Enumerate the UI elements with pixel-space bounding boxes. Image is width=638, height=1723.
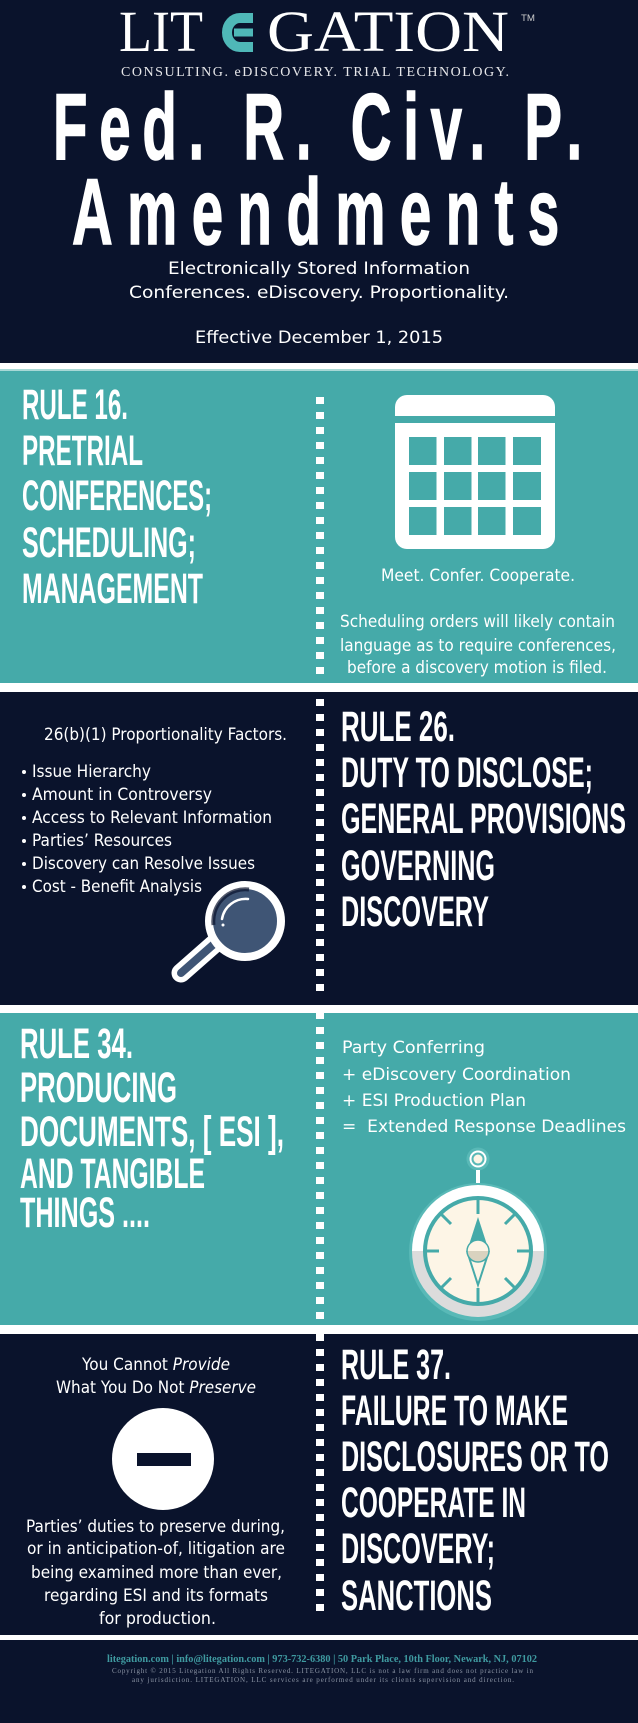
text: party conferring xyxy=(342,1038,626,1136)
text: proportionality factors: 26(b)(1) Proportionality Factors. xyxy=(44,725,287,744)
heading: rule 34: DOCUMENTS, [ ESI ], xyxy=(20,1108,284,1156)
text: scheduling orders: Scheduling orders will likely contain xyxy=(340,612,615,631)
caption: meet confer cooperate: Meet. Confer. Cooperate. xyxy=(381,566,575,585)
text: duties to preserve: for production. xyxy=(99,1609,216,1628)
text: duties to preserve: or in anticipation-of, litigation are xyxy=(27,1539,285,1558)
logo: GATION xyxy=(267,0,509,64)
logo: TM xyxy=(521,13,535,23)
heading: rule 26 xyxy=(341,703,626,936)
title: Fed. R. Civ. P. xyxy=(53,75,582,180)
text: party conferring: = Extended Response Deadlines xyxy=(342,1117,626,1136)
list: factors: Discovery can Resolve Issues xyxy=(32,854,255,873)
copyright: any jurisdiction. LITEGATION, LLC services are performed under its clients supervision and direction. xyxy=(132,1676,514,1684)
heading: rule 26: RULE 26. xyxy=(341,703,455,751)
contact line: litegation.com | info@litegation.com | 973-732-6380 | 50 Park Place, 10th Floor, Newark, NJ, 07102 xyxy=(107,1654,537,1665)
heading: rule 34: THINGS .... xyxy=(20,1189,150,1237)
text: duties to preserve: regarding ESI and its formats xyxy=(44,1586,268,1605)
text: party conferring: + ESI Production Plan xyxy=(342,1091,526,1110)
heading: rule 34: PRODUCING xyxy=(20,1064,177,1112)
panel: header xyxy=(0,0,638,363)
heading: rule 37: RULE 37. xyxy=(341,1341,451,1389)
icon: magnifying glass xyxy=(181,885,281,973)
subtitle: Electronically Stored Information xyxy=(168,259,470,278)
heading: rule 16: CONFERENCES; xyxy=(22,472,212,520)
list: factors: Parties’ Resources xyxy=(32,831,172,850)
effective date: Effective December 1, 2015 xyxy=(195,328,443,347)
icon: compass xyxy=(409,1148,547,1321)
title: Amendments xyxy=(72,160,559,265)
list: factors: Cost - Benefit Analysis xyxy=(32,877,202,896)
copyright: Copyright © 2015 Litegation All Rights Reserved. LITEGATION, LLC is not a law firm and does not practice law in xyxy=(112,1667,534,1675)
heading: rule 16: RULE 16. xyxy=(22,381,128,429)
heading: rule 16 xyxy=(22,381,212,613)
logo xyxy=(119,0,535,64)
text: duties to preserve xyxy=(26,1517,285,1628)
text: party conferring: Party Conferring xyxy=(342,1038,485,1057)
heading: rule 16: MANAGEMENT xyxy=(22,565,203,613)
text: scheduling orders: before a discovery motion is filed. xyxy=(347,658,607,677)
heading: rule 16: SCHEDULING; xyxy=(22,519,196,567)
panel: rule 16 xyxy=(0,369,638,683)
heading: rule 26: GOVERNING xyxy=(341,842,495,890)
heading: rule 37 xyxy=(341,1341,609,1620)
list: factors xyxy=(22,762,272,896)
panel: rule 37 xyxy=(0,1334,638,1635)
panel: rule 26 xyxy=(0,692,638,1005)
title xyxy=(53,75,582,265)
text: duties to preserve: Parties’ duties to preserve during, xyxy=(26,1517,285,1536)
subtitle: Conferences. eDiscovery. Proportionality. xyxy=(129,283,509,302)
text: cannot provide: What You Do Not Preserve xyxy=(56,1378,256,1397)
text: cannot provide: You Cannot Provide xyxy=(81,1355,230,1374)
list: factors: Amount in Controversy xyxy=(32,785,212,804)
heading: rule 16: PRETRIAL xyxy=(22,427,143,475)
subtitle xyxy=(129,259,509,302)
heading: rule 37: DISCOVERY; xyxy=(341,1525,495,1573)
heading: rule 34: RULE 34. xyxy=(20,1020,133,1068)
panel: footer xyxy=(0,1640,638,1723)
logo: LIT xyxy=(119,0,203,64)
list: factors: Access to Relevant Information xyxy=(32,808,272,827)
heading: rule 34 xyxy=(20,1020,284,1237)
text: cannot provide xyxy=(56,1355,256,1397)
list: factors: Issue Hierarchy xyxy=(32,762,151,781)
text: duties to preserve: being examined more than ever, xyxy=(31,1563,282,1582)
heading: rule 37: SANCTIONS xyxy=(341,1572,492,1620)
panel: rule 34 xyxy=(0,1013,638,1325)
heading: rule 26: DISCOVERY xyxy=(341,888,489,936)
icon: calendar xyxy=(395,395,555,549)
text: scheduling orders: language as to require conferences, xyxy=(340,636,616,655)
text: party conferring: + eDiscovery Coordination xyxy=(342,1065,571,1084)
heading: rule 34: AND TANGIBLE xyxy=(20,1150,205,1198)
icon: minus sign xyxy=(112,1408,214,1510)
text: scheduling orders xyxy=(340,612,616,677)
tagline: CONSULTING. eDISCOVERY. TRIAL TECHNOLOGY. xyxy=(121,65,509,80)
copyright xyxy=(112,1667,534,1684)
